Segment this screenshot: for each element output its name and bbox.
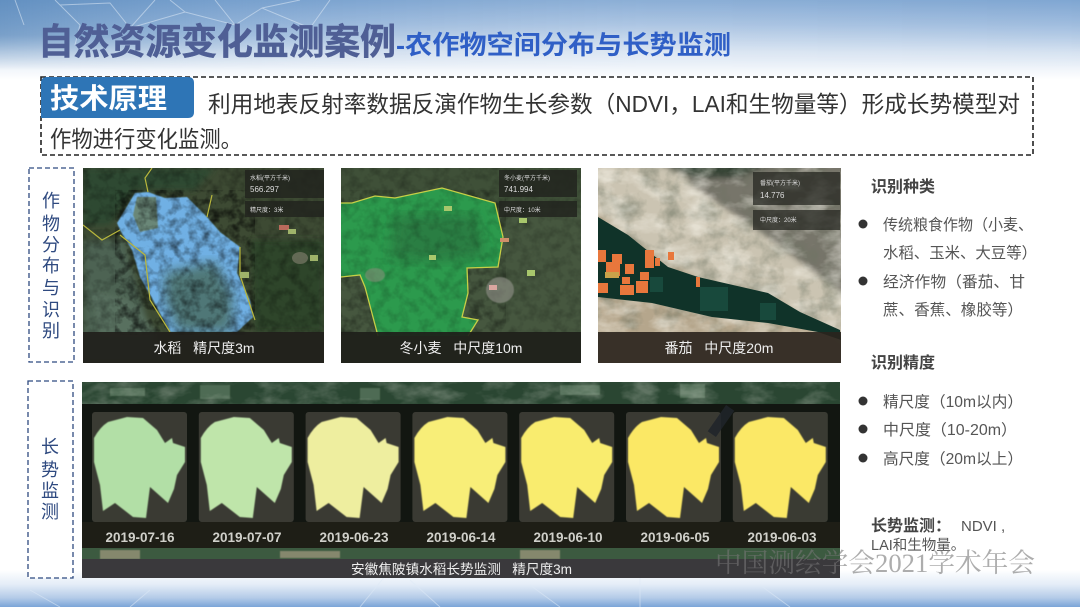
label box: crop distribution and identification: 别 — [42, 321, 60, 341]
road label — [708, 405, 734, 437]
label box: crop distribution and identification: 作 — [42, 191, 60, 211]
panel: growth monitoring time series — [82, 382, 840, 578]
right column: growth monitoring note: LAI和生物量。 — [871, 537, 965, 554]
right column: precision: 精尺度（10m以内） — [883, 393, 1023, 411]
caption: 安徽焦陂镇水稻长势监测 精尺度3m — [351, 562, 572, 577]
province boundary — [83, 168, 255, 332]
province boundary — [341, 188, 503, 336]
right column: crop types — [858, 178, 1037, 319]
right column: precision — [858, 353, 1023, 468]
date labels: 2019-06-14 — [426, 530, 496, 545]
date labels: 2019-07-16 — [105, 530, 175, 545]
tag: 技术原理 — [41, 77, 194, 118]
tag: 技术原理: 技术原理 — [50, 83, 167, 114]
label box: crop distribution and identification: 物 — [42, 214, 60, 234]
info boxes: 566.297 — [250, 185, 279, 194]
info boxes: 冬小麦(平方千米) — [504, 174, 550, 182]
right column: growth monitoring note: NDVI , — [961, 518, 1005, 535]
right column: precision: 高尺度（20m以上） — [883, 450, 1023, 468]
caption — [598, 332, 841, 363]
date labels: 2019-06-05 — [640, 530, 710, 545]
caption: 冬小麦 中尺度10m — [400, 340, 522, 356]
label box: crop distribution and identification: 识 — [42, 300, 60, 320]
label box: growth monitoring: 势 — [41, 460, 59, 480]
date labels: 2019-06-03 — [747, 530, 817, 545]
info boxes: 741.994 — [504, 185, 533, 194]
label box: growth monitoring: 长 — [41, 437, 59, 457]
caption: 水稻 精尺度3m — [153, 340, 255, 356]
info boxes: 中尺度：20米 — [760, 216, 797, 224]
right column: crop types: 水稻、玉米、大豆等） — [883, 244, 1037, 262]
title — [38, 21, 731, 62]
rice area — [115, 190, 255, 335]
title: 自然资源变化监测案例 — [38, 21, 396, 62]
right column: precision: 中尺度（10-20m） — [883, 421, 1017, 439]
caption — [82, 559, 840, 578]
date labels: 2019-06-23 — [319, 530, 389, 545]
principle text: 利用地表反射率数据反演作物生长参数（NDVI，LAI和生物量等）形成长势模型对 — [208, 91, 1020, 117]
wheat area — [341, 188, 506, 336]
info boxes: 精尺度：3米 — [250, 206, 283, 214]
growth tiles — [92, 412, 828, 522]
map: tomato — [598, 168, 841, 363]
info boxes — [753, 172, 840, 230]
info boxes: 水稻(平方千米) — [250, 174, 290, 182]
info boxes — [245, 170, 324, 217]
info boxes: 番茄(平方千米) — [760, 179, 800, 187]
watermark: 中国测绘学会2021学术年会 — [715, 548, 1035, 578]
label box: growth monitoring: 测 — [41, 502, 59, 522]
caption — [83, 332, 324, 363]
label box: crop distribution and identification: 分 — [42, 235, 60, 255]
right column: precision: 识别精度 — [871, 353, 935, 372]
label box: growth monitoring — [28, 381, 73, 578]
title: -农作物空间分布与长势监测 — [396, 30, 731, 60]
right column: growth monitoring note: 长势监测： — [871, 516, 951, 535]
right column: crop types: 传统粮食作物（小麦、 — [883, 216, 1033, 234]
principle text — [50, 91, 1020, 152]
date labels — [106, 532, 816, 542]
label box: crop distribution and identification: 布 — [42, 256, 60, 276]
map: rice — [83, 168, 324, 363]
date labels: 2019-07-07 — [212, 530, 282, 545]
label box: crop distribution and identification — [29, 168, 74, 362]
right column: crop types: 识别种类 — [871, 178, 935, 196]
date labels: 2019-06-10 — [533, 530, 603, 545]
principle text: 作物进行变化监测。 — [50, 126, 242, 152]
info boxes — [499, 170, 577, 217]
info boxes: 14.776 — [760, 191, 785, 200]
map: winter wheat — [341, 168, 581, 363]
right column: growth monitoring note — [871, 516, 1005, 554]
tomato fields — [598, 250, 700, 295]
label box: growth monitoring: 监 — [41, 481, 59, 501]
crop band — [598, 217, 841, 340]
right column: crop types: 蔗、香蕉、橡胶等） — [883, 301, 1023, 319]
panel: technical principle — [41, 77, 1033, 155]
info boxes: 中尺度：10米 — [504, 206, 541, 214]
caption: 番茄 中尺度20m — [665, 340, 773, 356]
caption — [341, 332, 581, 363]
label box: crop distribution and identification: 与 — [42, 278, 60, 298]
right column: crop types: 经济作物（番茄、甘 — [883, 273, 1025, 291]
